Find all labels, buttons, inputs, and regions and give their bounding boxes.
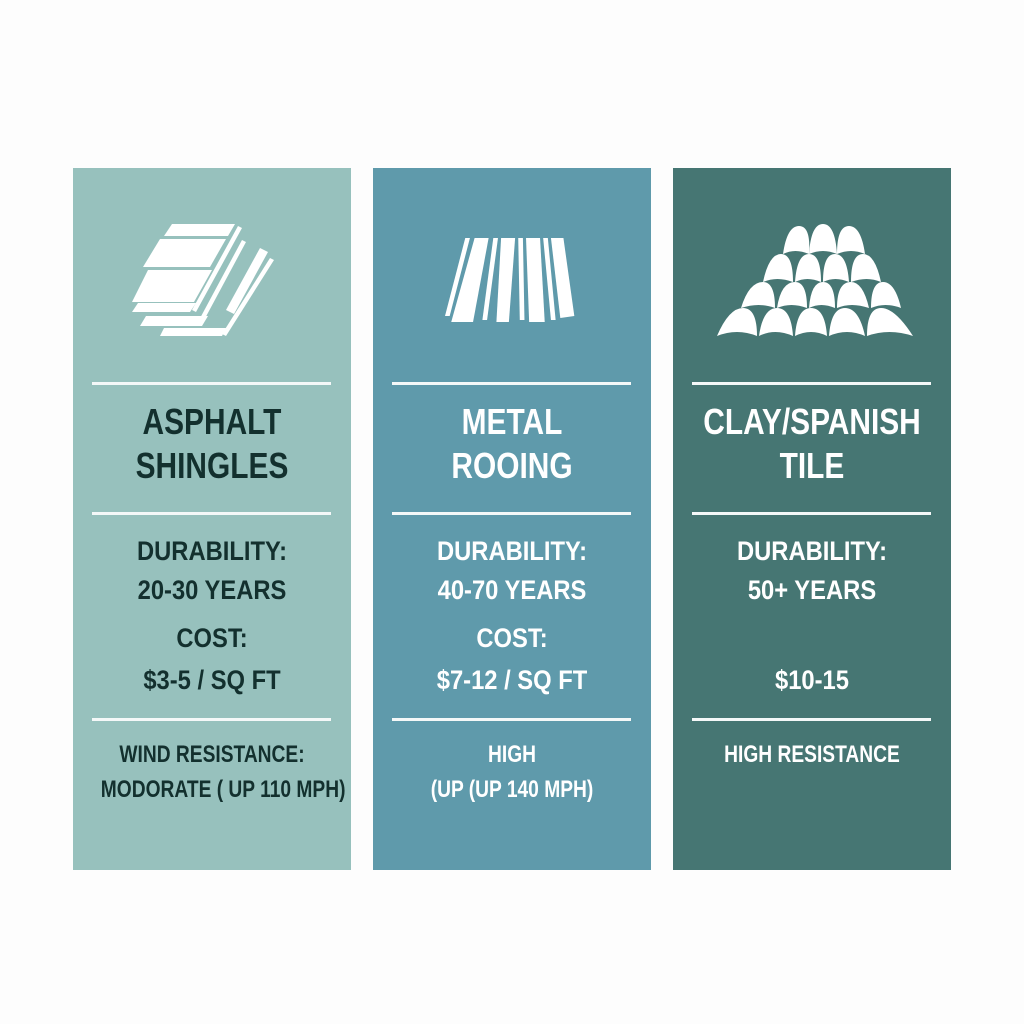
- panel: clay/spanish tile: DURABILITY:: [737, 536, 887, 566]
- panel: asphalt shingles: 20-30 YEARS: [138, 575, 286, 605]
- panel: asphalt shingles: DURABILITY:: [137, 536, 287, 566]
- panel: asphalt shingles: SHINGLES: [136, 445, 288, 486]
- icon: clay tiles: [717, 224, 913, 336]
- panel: asphalt shingles: WIND RESISTANCE:: [119, 741, 305, 768]
- panel: clay/spanish tile: TILE: [780, 445, 844, 486]
- panel: metal roofing: $7-12 / SQ FT: [437, 665, 587, 695]
- panel: metal roofing: (UP (UP 140 MPH): [431, 776, 593, 803]
- panel: metal roofing: HIGH: [488, 741, 536, 768]
- panel: asphalt shingles: ASPHALT: [143, 401, 281, 442]
- panel: clay/spanish tile: $10-15: [775, 665, 849, 695]
- panel: metal roofing: 40-70 YEARS: [438, 575, 586, 605]
- panel: metal roofing: DURABILITY:: [437, 536, 587, 566]
- panel: asphalt shingles: COST:: [176, 623, 248, 653]
- panel: clay/spanish tile: [673, 168, 951, 870]
- panel: asphalt shingles: MODORATE ( UP 110 MPH): [101, 776, 345, 803]
- panel: metal roofing: METAL: [462, 401, 562, 442]
- panel: clay/spanish tile: 50+ YEARS: [748, 575, 876, 605]
- panel: metal roofing: ROOING: [451, 445, 573, 486]
- panel: asphalt shingles: $3-5 / SQ FT: [143, 665, 281, 695]
- icon: shingles: [132, 224, 274, 336]
- icon: corrugated metal: [445, 238, 574, 322]
- panel: clay/spanish tile: CLAY/SPANISH: [703, 401, 921, 442]
- panel: metal roofing: COST:: [476, 623, 548, 653]
- panel: clay/spanish tile: HIGH RESISTANCE: [724, 741, 900, 768]
- panel: metal roofing: [373, 168, 651, 870]
- panel: asphalt shingles: [73, 168, 351, 870]
